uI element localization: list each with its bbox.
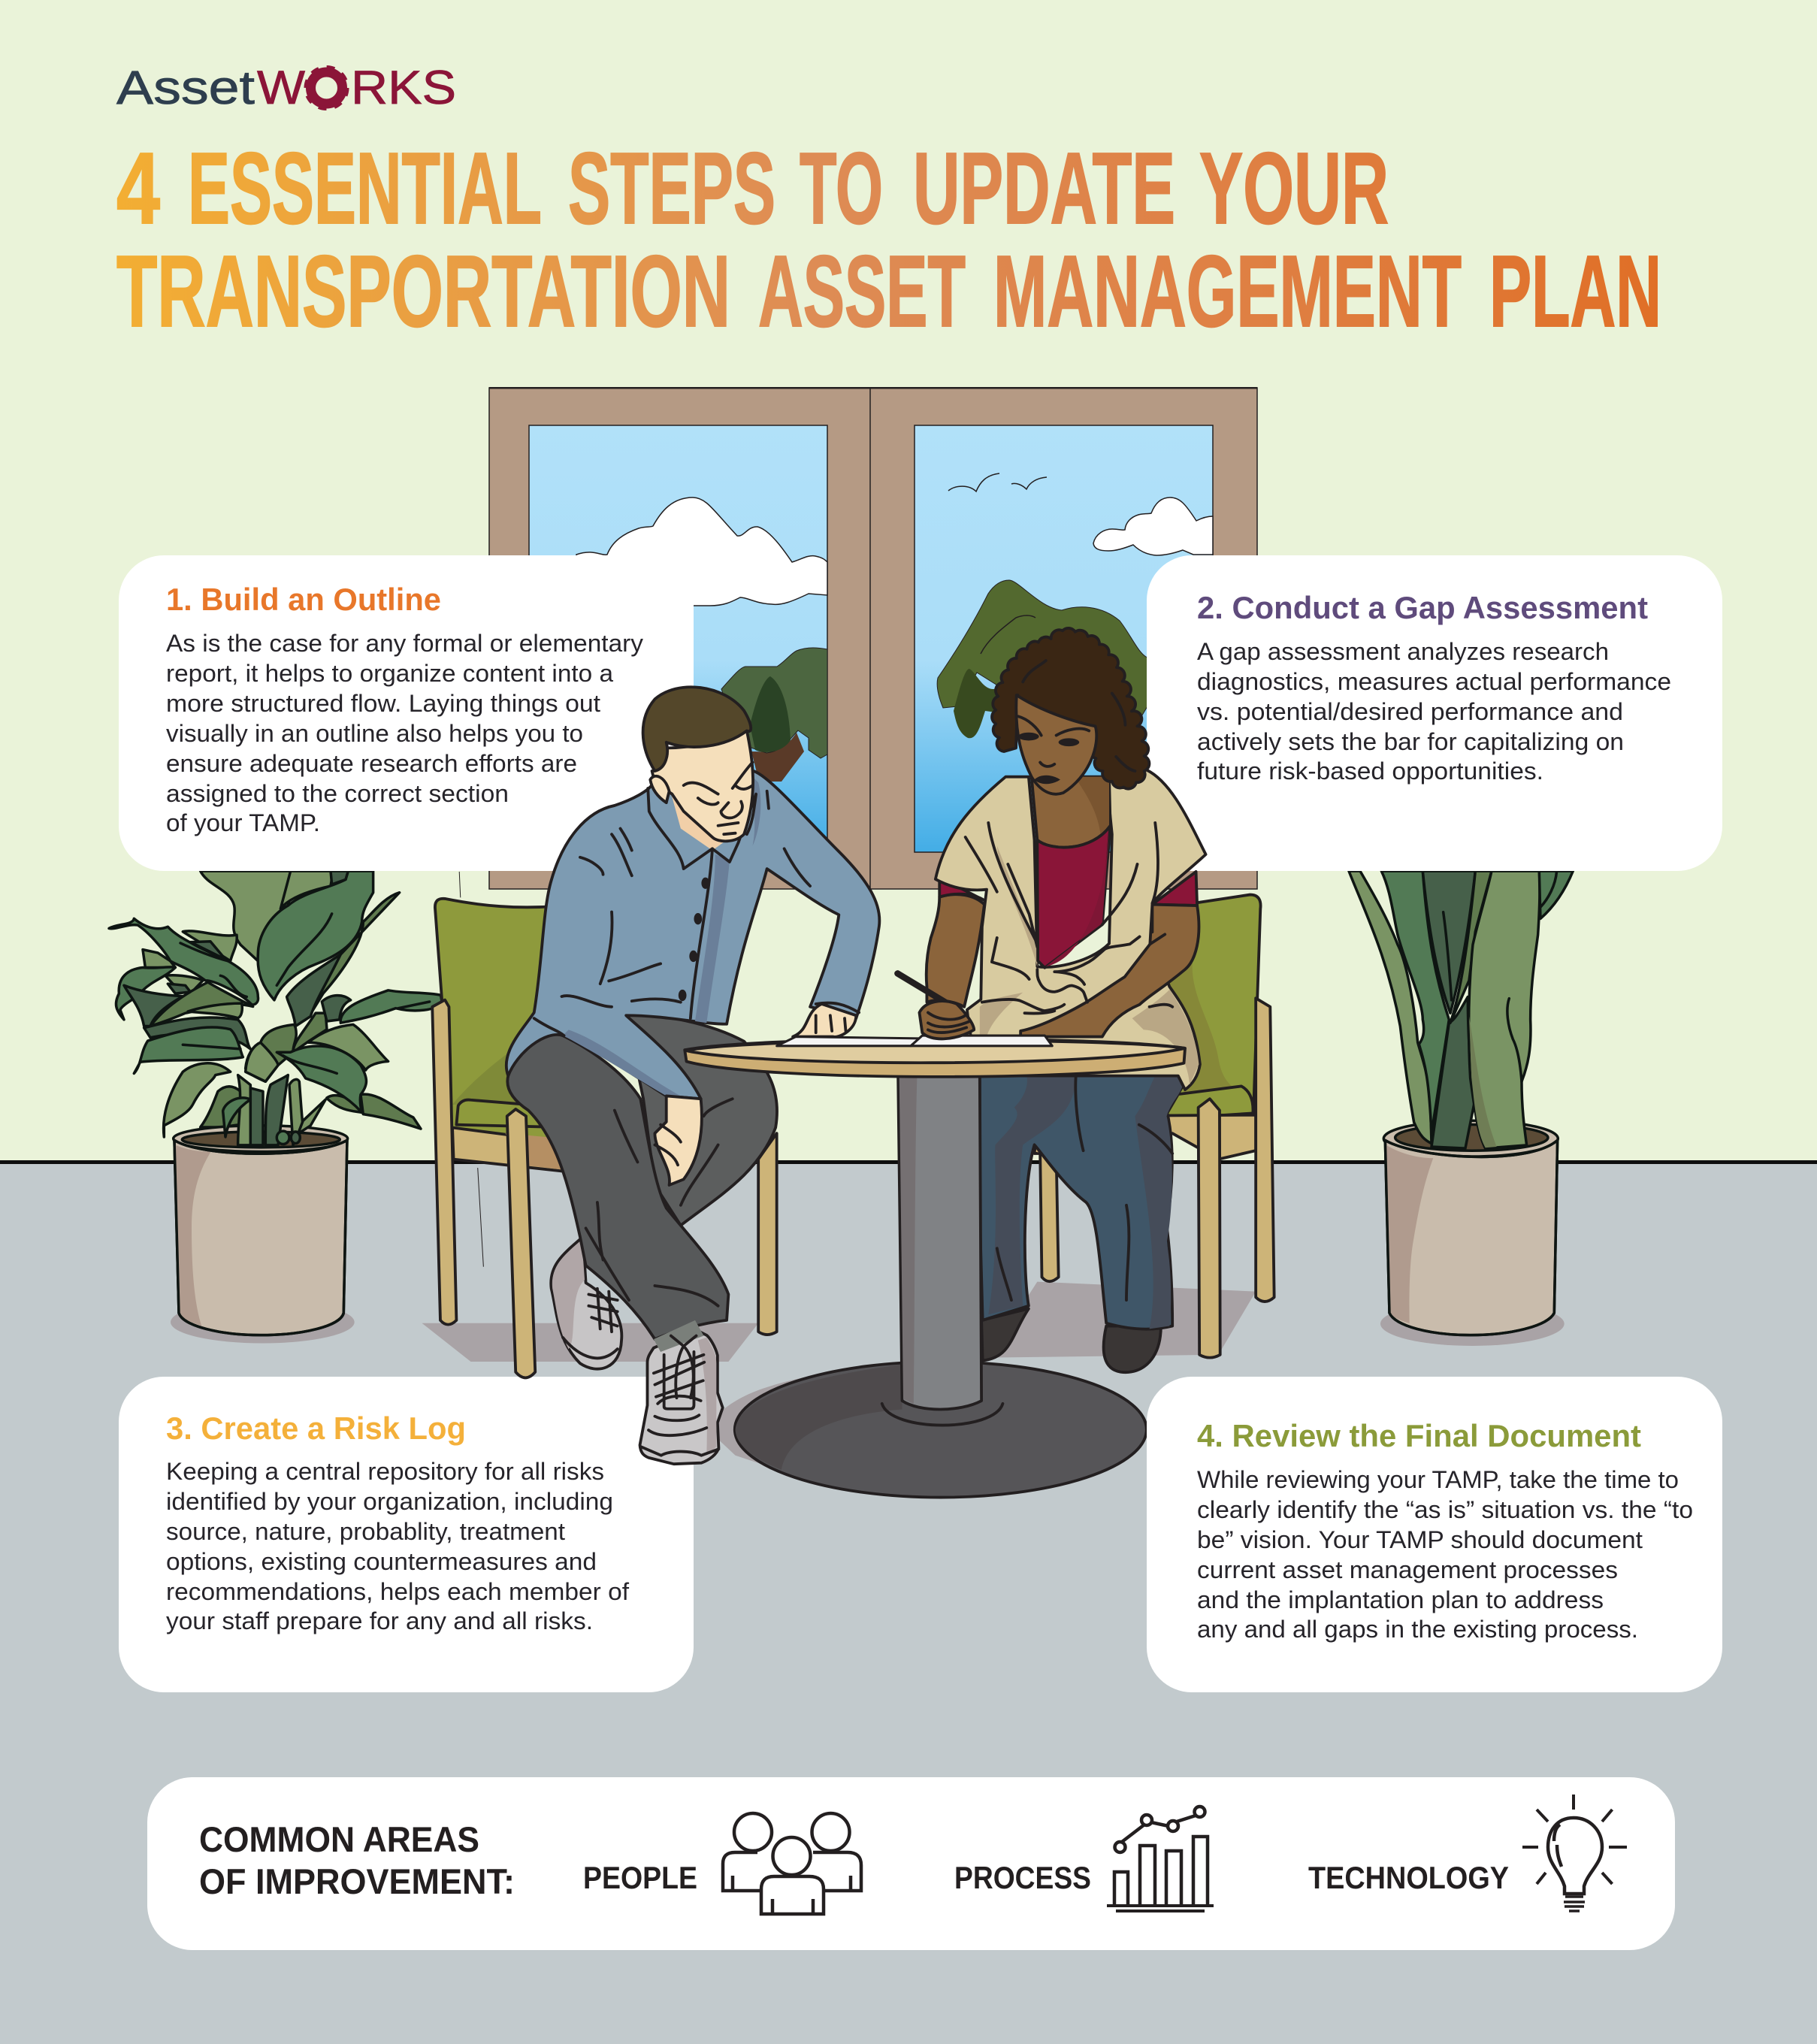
table: top — [685, 1039, 1185, 1077]
card 4: Review the Final Document: any and all gaps in the existing process. — [1197, 1616, 1638, 1643]
table base — [717, 1362, 1147, 1498]
man: hand on table — [793, 1004, 856, 1037]
man: shirt — [506, 771, 879, 1099]
man: sock — [654, 1320, 703, 1352]
man: near leg — [507, 1032, 728, 1339]
card 4: Review the Final Document: be” vision. Your TAMP should document — [1197, 1526, 1643, 1553]
right chair — [1035, 895, 1274, 1358]
card 4: Review the Final Document: and the implantation plan to address — [1197, 1586, 1604, 1613]
card 2: Conduct a Gap Assessment: actively sets the bar for capitalizing on — [1197, 728, 1624, 755]
icon: process chart — [1107, 1807, 1214, 1912]
left chair — [432, 899, 777, 1377]
woman: sleeve left — [939, 878, 984, 900]
card 4: Review the Final Document: While reviewing your TAMP, take the time to — [1197, 1466, 1679, 1493]
window — [489, 387, 1257, 889]
man: far leg — [626, 1015, 777, 1226]
woman: neck and chest — [1032, 777, 1111, 848]
right plant pot — [1380, 1140, 1565, 1346]
woman: shoes — [981, 1309, 1029, 1360]
card 1: Build an Outline: report, it helps to organize content into a — [166, 660, 613, 687]
thin stray lines near chair — [459, 872, 483, 1267]
title: TO — [800, 132, 883, 245]
logo: AssetWORKS — [116, 62, 456, 114]
woman: face — [1016, 695, 1096, 794]
title — [116, 132, 1661, 348]
woman: jeans — [980, 1076, 1184, 1329]
woman: cardigan folds — [966, 823, 1172, 1014]
wall background — [0, 0, 1817, 1163]
man: ear — [650, 776, 670, 803]
title: TRANSPORTATION — [116, 234, 730, 348]
title: ESSENTIAL — [188, 132, 542, 245]
man: neck — [671, 793, 744, 851]
title: PLAN — [1489, 234, 1661, 348]
woman: features — [1018, 716, 1089, 736]
title: YOUR — [1199, 132, 1389, 245]
card 1: Build an Outline: more structured flow. Laying things out — [166, 690, 600, 717]
title: STEPS — [568, 132, 775, 245]
card 3: Create a Risk Log: options, existing countermeasures and — [166, 1548, 597, 1575]
bottom panel: common areas of improvement — [147, 1777, 1675, 1950]
card 2: Conduct a Gap Assessment: A gap assessment analyzes research — [1197, 638, 1609, 665]
logo: AssetWORKS: RKS — [351, 62, 456, 114]
label: people: PEOPLE — [583, 1860, 697, 1895]
label: process: PROCESS — [954, 1860, 1091, 1895]
woman: right sleeve — [1152, 872, 1197, 906]
skirting line — [0, 1160, 1817, 1164]
card 1: Build an Outline — [119, 555, 694, 871]
title: 4 — [116, 132, 160, 245]
title: ASSET — [758, 234, 966, 348]
table: column — [882, 1076, 1002, 1426]
card 3: Create a Risk Log: source, nature, probablity, treatment — [166, 1518, 565, 1545]
hand — [919, 1001, 974, 1039]
card 3: Create a Risk Log: your staff prepare for any and all risks. — [166, 1607, 593, 1634]
woman: magenta top — [1037, 826, 1111, 968]
card 3: Create a Risk Log: Keeping a central repository for all risks — [166, 1458, 604, 1485]
card 1: Build an Outline: visually in an outline also helps you to — [166, 720, 583, 747]
title: UPDATE — [913, 132, 1175, 245]
card 1: Build an Outline: assigned to the correct section — [166, 780, 509, 807]
icon: light bulb — [1522, 1795, 1627, 1911]
man: front shoe — [640, 1330, 723, 1464]
man: laces — [563, 1289, 618, 1358]
card 4: Review the Final Document — [1147, 1377, 1722, 1692]
card 4: Review the Final Document: clearly identify the “as is” situation vs. the “to — [1197, 1496, 1693, 1523]
left plant — [109, 871, 442, 1151]
card 1: Build an Outline: ensure adequate research efforts are — [166, 750, 577, 777]
woman's hand and pen — [897, 973, 974, 1039]
woman: hair curls — [1023, 661, 1135, 771]
card 4: Review the Final Document: 4. Review the Final Document — [1197, 1418, 1641, 1453]
woman: cardigan shading — [980, 846, 1199, 1084]
logo: AssetWORKS: Asset — [116, 62, 255, 114]
card 3: Create a Risk Log: recommendations, helps each member of — [166, 1578, 629, 1605]
woman — [927, 628, 1206, 1372]
woman: far arm — [927, 894, 984, 1007]
man: features — [684, 763, 753, 834]
card 3: Create a Risk Log: identified by your organization, including — [166, 1488, 613, 1515]
card 2: Conduct a Gap Assessment: diagnostics, measures actual performance — [1197, 668, 1671, 695]
woman: cardigan — [936, 770, 1206, 1090]
label: technology: TECHNOLOGY — [1308, 1860, 1509, 1895]
card 2: Conduct a Gap Assessment: vs. potential/desired performance and — [1197, 698, 1623, 725]
card 4: Review the Final Document: current asset management processes — [1197, 1556, 1618, 1583]
man: hand on knee — [655, 1096, 702, 1185]
man: buttons — [679, 878, 709, 1001]
card 3: Create a Risk Log — [119, 1377, 694, 1692]
floor shadow under right chair — [988, 1282, 1256, 1358]
card 1: Build an Outline: As is the case for any formal or elementary — [166, 630, 643, 657]
card 2: Conduct a Gap Assessment — [1147, 555, 1722, 871]
icon: people — [723, 1813, 861, 1914]
card 1: Build an Outline: 1. Build an Outline — [166, 582, 441, 617]
panel heading: COMMON AREAS — [199, 1819, 479, 1859]
table: paper left — [777, 1037, 919, 1046]
card 1: Build an Outline: of your TAMP. — [166, 809, 320, 836]
title: MANAGEMENT — [993, 234, 1462, 348]
panel heading — [199, 1819, 515, 1901]
logo: AssetWORKS: W — [257, 62, 306, 114]
right plant — [1349, 871, 1573, 1157]
card 2: Conduct a Gap Assessment: future risk-based opportunities. — [1197, 757, 1543, 785]
man: back shoe — [551, 1237, 621, 1369]
left window pane with cloud and tree — [529, 425, 827, 852]
left plant pot — [171, 1140, 355, 1344]
woman: hair — [992, 628, 1149, 789]
floor — [0, 1161, 1817, 2044]
card 3: Create a Risk Log: 3. Create a Risk Log — [166, 1411, 466, 1446]
man: shirt folds and collar — [534, 788, 859, 1036]
floor shadow under left chair — [422, 1323, 758, 1362]
right window pane with cloud, birds and tree — [915, 425, 1213, 852]
pen — [897, 973, 951, 1005]
man: face — [652, 730, 753, 841]
man: hair — [643, 687, 751, 771]
card 2: Conduct a Gap Assessment: 2. Conduct a Gap Assessment — [1197, 590, 1648, 625]
panel heading: OF IMPROVEMENT: — [199, 1861, 515, 1901]
woman: right arm — [1020, 905, 1199, 1037]
table — [685, 1036, 1185, 1426]
table: paper right — [911, 1036, 1052, 1046]
man — [506, 687, 879, 1464]
man: front shoe laces — [641, 1336, 718, 1456]
